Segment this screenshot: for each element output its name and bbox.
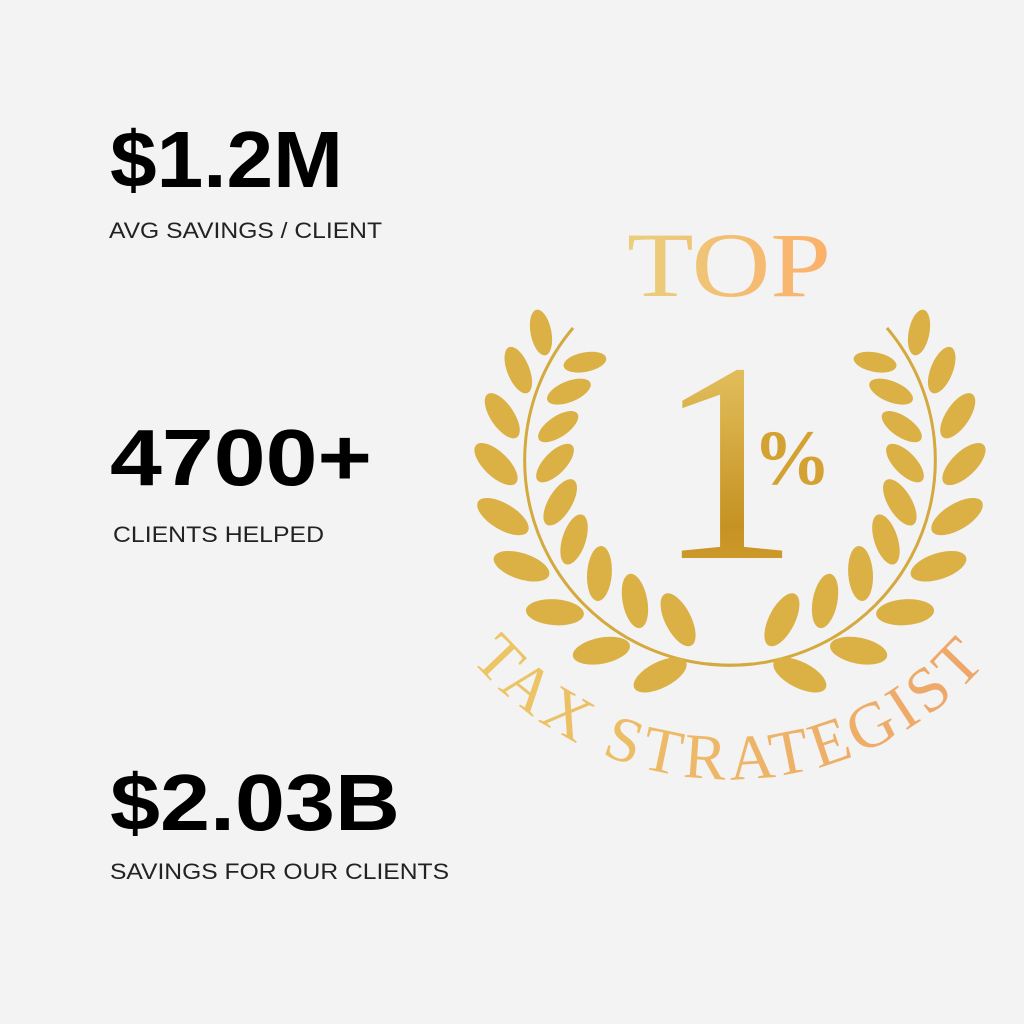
- badge: top 1% tax strategist: [474, 214, 986, 780]
- stat: total savings: SAVINGS FOR OUR CLIENTS: [110, 859, 449, 884]
- stat: clients helped: CLIENTS HELPED: [113, 522, 324, 547]
- stat: avg savings: AVG SAVINGS / CLIENT: [109, 218, 382, 243]
- stat: clients helped: [110, 413, 372, 547]
- curved text: TAX STRATEGIST: TAX STRATEGIST: [477, 632, 980, 780]
- heading: TOP: TOP: [627, 214, 831, 316]
- stat: clients helped: 4700+: [110, 413, 372, 502]
- stat: total savings: [110, 758, 449, 884]
- stat: avg savings: [109, 115, 382, 243]
- percent sign: %: [753, 414, 831, 501]
- numeral: 1: 1: [657, 304, 799, 620]
- stat: avg savings: $1.2M: [110, 115, 343, 204]
- wreath: [467, 300, 993, 712]
- stat: total savings: $2.03B: [110, 758, 400, 847]
